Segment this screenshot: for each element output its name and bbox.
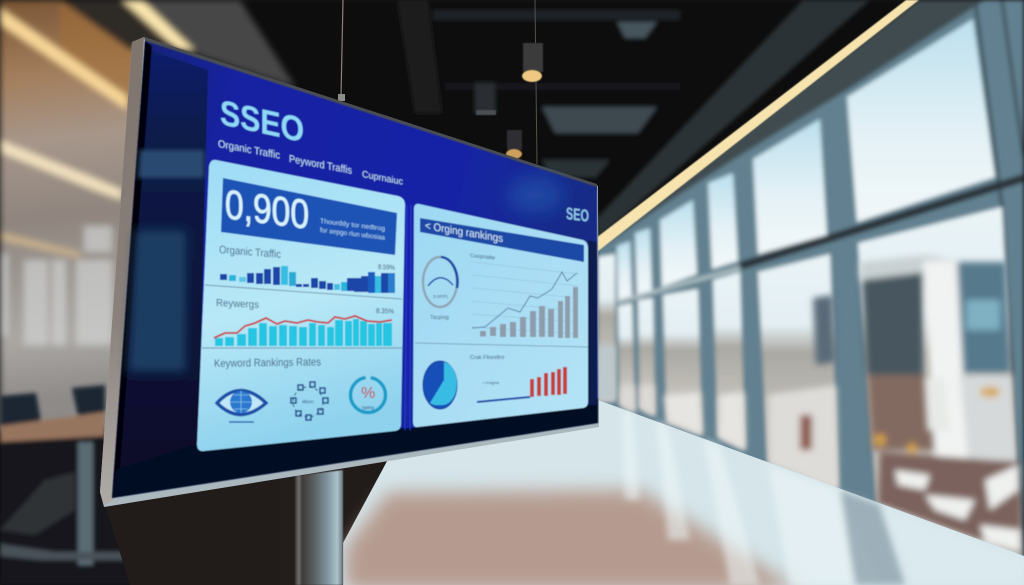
icon: eye with globe [217,390,266,422]
banner caption line two: for aepgo rlun wbosiaa [320,227,385,242]
logo: SEO: SEO [566,204,589,226]
panel: right dashboard [413,204,588,427]
bar chart: organic traffic [220,266,395,293]
chart label: Cuopnaite: Cuopnaite [470,253,495,261]
reflective conference table [343,400,1024,585]
icon: percent ring: typing [362,405,375,410]
bar and line chart: rankings [472,272,578,338]
panel separator lines [405,205,411,430]
right mullion dark edges [975,0,1024,560]
chart label: Crak Flioreltre: Crak Flioreltre [470,355,505,361]
dark left edge and reflections [112,41,208,498]
icon: percent ring: % [361,385,375,402]
table reflection of window columns [622,410,1024,585]
divider [415,343,588,347]
banner caption: Thourddy tor nedtrog [320,218,385,233]
transom dark band [740,178,1024,266]
glare near top right [507,177,563,213]
big number: 0,900 [225,181,309,238]
right wall of windows [597,0,1024,565]
gridlines [472,262,578,334]
label: Reywergs: Reywergs [216,297,259,311]
header band [420,218,584,262]
icon: percent ring [350,378,386,412]
nav label: Cuprnaiuc: Cuprnaiuc [362,169,403,188]
bar and line chart: keywords [214,316,392,346]
pole shaft [295,470,343,585]
legend: • Graghot [483,381,500,385]
transom light band [617,268,740,302]
upper window panes [617,19,995,300]
heading: SSEO: SSEO [220,92,304,150]
icon: ring of documents [291,382,328,420]
panel: left dashboard [197,160,405,451]
monitor screen [112,41,598,498]
metric banner [221,178,397,255]
value: 8.59%: 8.59% [378,264,395,272]
gauge: 3.0PPL [433,294,449,300]
soffit over window heads [597,0,985,250]
monitor bezel [100,37,599,507]
gauge [423,257,457,321]
light strip [596,0,919,252]
ceiling beam and soffit [597,0,1024,290]
dark lower band [112,398,598,498]
ceiling [0,0,1024,300]
nav label: Peyword Traffis: Peyword Traffis [289,153,352,177]
label: Keyword Rankings Rates: Keyword Rankings Rates [214,356,321,370]
gauge caption: Tacpiog [430,315,449,321]
window frame backdrop [597,0,1024,565]
pendant lamps and cables [338,0,543,164]
bar chart: red bars with blue line [477,367,567,402]
value: 8.35%: 8.35% [376,308,394,316]
blurred city buildings through the windows [597,255,1022,556]
lower right dark fade [588,240,597,405]
monitor stand backing [280,470,343,585]
icon: ring of documents: abyac [302,399,315,404]
table reflection of floor [345,490,800,585]
lower window panes [597,207,1020,556]
label: Organic Traffic: Organic Traffic [219,244,281,261]
header title: < Orging rankings [425,220,503,245]
pie chart [423,361,457,409]
floor in shadow [105,420,600,585]
nav label: Organic Traffic: Organic Traffic [218,138,281,162]
left glass wall with warm light strips [0,0,296,430]
meeting table and chairs [0,385,235,585]
divider [202,285,402,348]
